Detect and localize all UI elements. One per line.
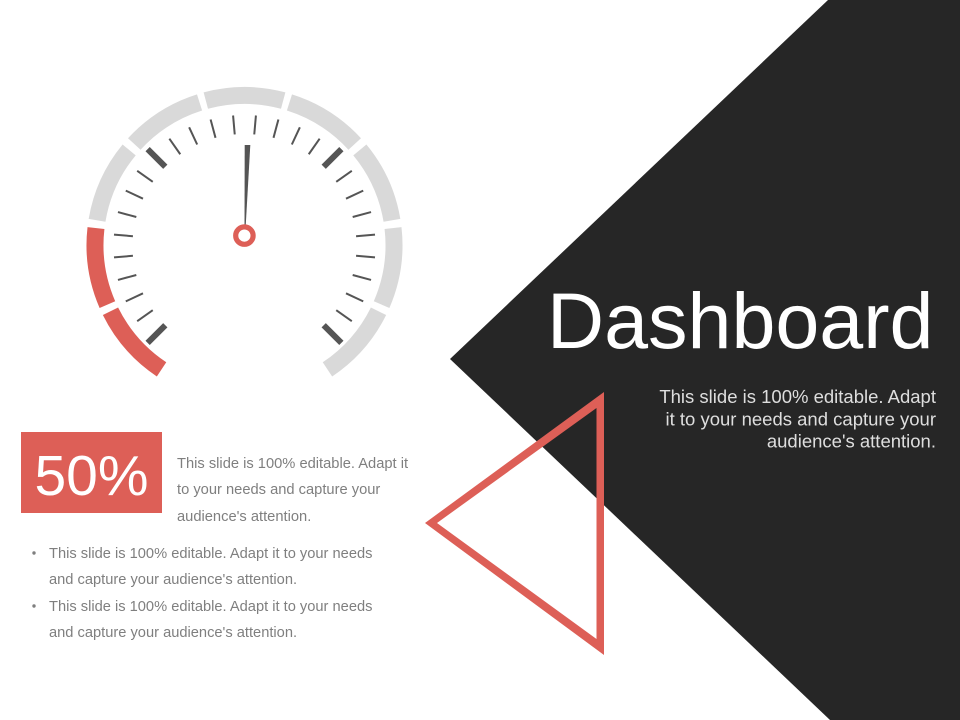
bullet list: and capture your audience's attention. <box>49 572 297 588</box>
gauge major ticks <box>148 149 341 343</box>
stat description: to your needs and capture your <box>177 482 380 498</box>
bullet list <box>32 546 372 641</box>
gauge needle <box>244 145 250 226</box>
gauge minor ticks <box>114 115 375 321</box>
subtitle text block <box>659 386 936 452</box>
gauge arc segments <box>91 96 398 373</box>
bullet list: This slide is 100% editable. Adapt it to your needs <box>49 546 372 562</box>
title: Dashboard <box>547 276 934 365</box>
subtitle text block: This slide is 100% editable. Adapt <box>659 386 936 407</box>
gauge <box>91 96 398 373</box>
stat box 50%: 50% <box>34 444 149 508</box>
stat box 50% <box>21 432 162 513</box>
stat description <box>177 456 408 525</box>
bullet list: and capture your audience's attention. <box>49 625 297 641</box>
dark arrow background shape <box>450 0 960 720</box>
subtitle text block: audience's attention. <box>767 430 936 452</box>
bullet list: This slide is 100% editable. Adapt it to your needs <box>49 599 372 615</box>
stat description: This slide is 100% editable. Adapt it <box>177 456 408 472</box>
red triangle outline <box>425 392 604 655</box>
subtitle text block: it to your needs and capture your <box>666 408 936 430</box>
gauge hub <box>236 227 253 244</box>
stat description: audience's attention. <box>177 509 311 525</box>
